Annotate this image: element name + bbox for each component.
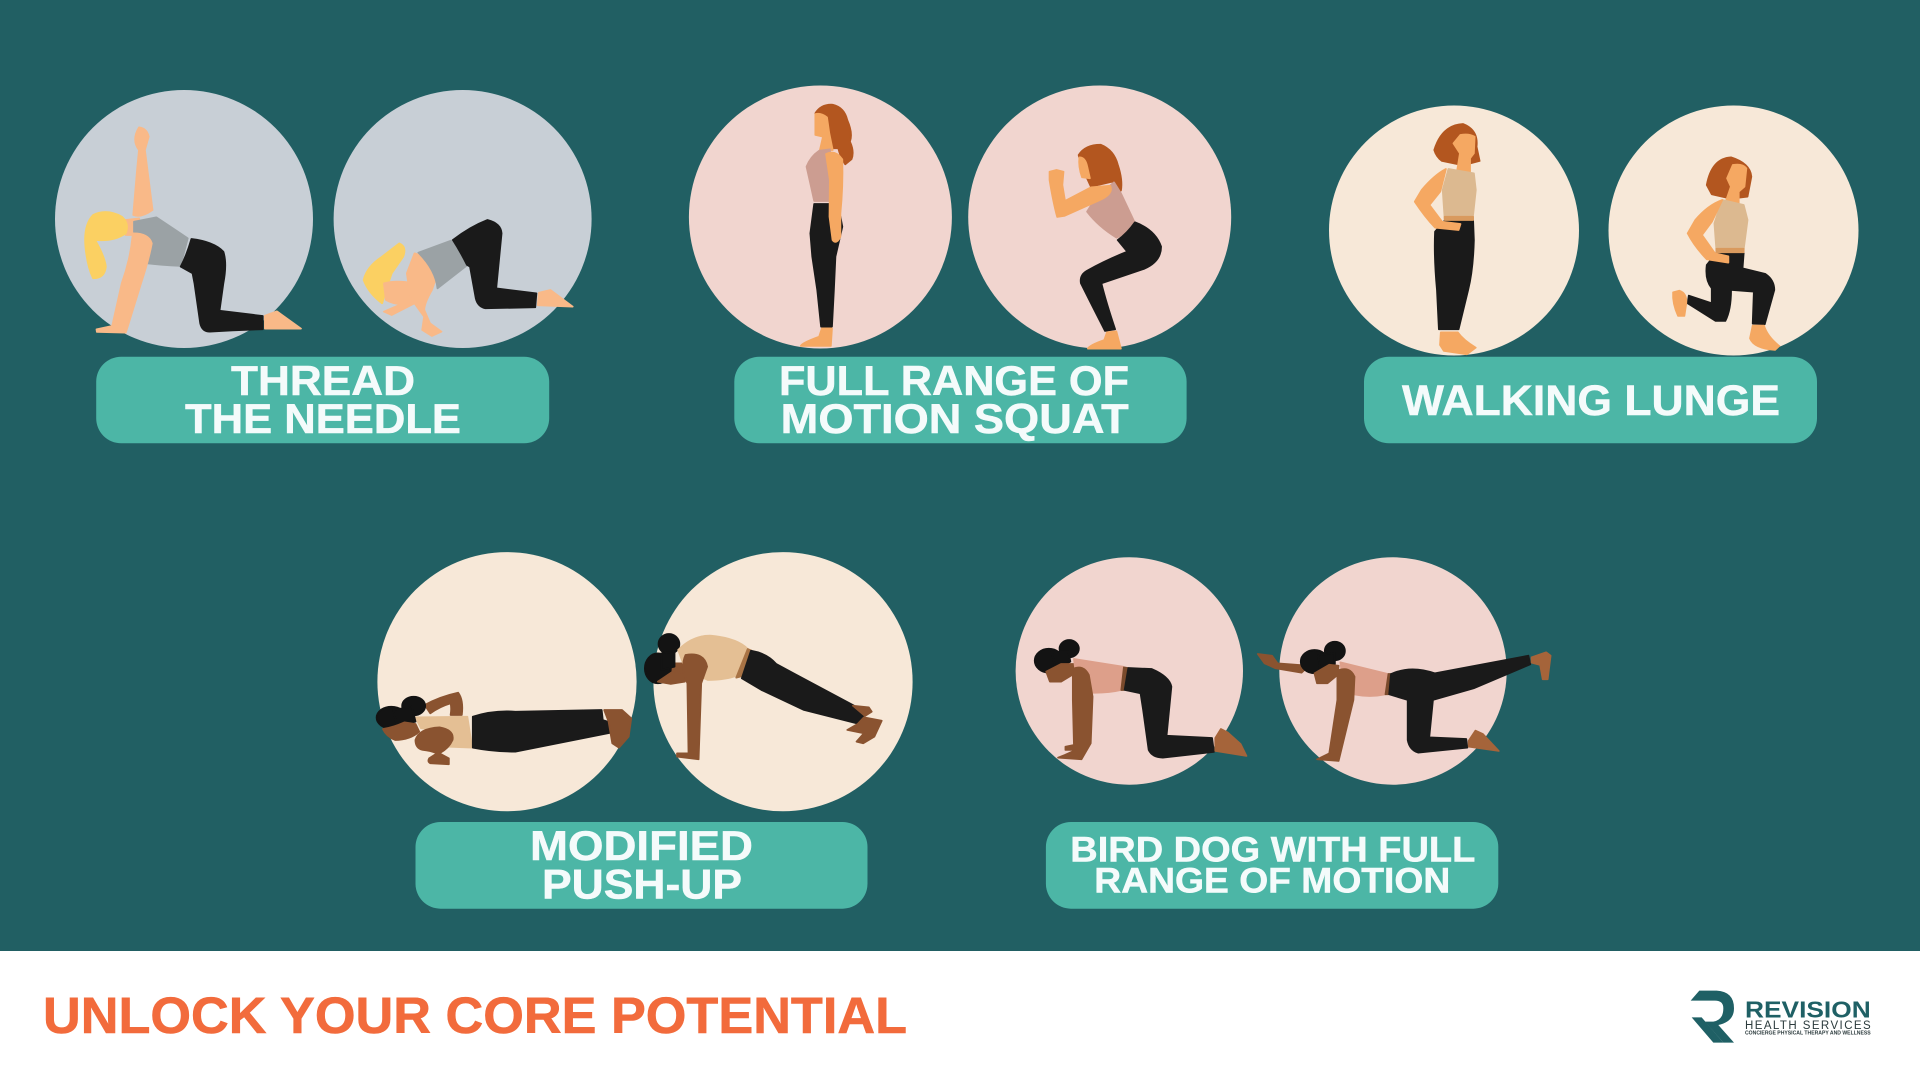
figure: lunge pose xyxy=(1673,157,1779,350)
label: walking lunge: WALKING LUNGE xyxy=(1402,377,1780,425)
label: thread the needle xyxy=(96,357,549,443)
label: walking lunge xyxy=(1364,357,1817,443)
label: bird dog with full range of motion xyxy=(1046,822,1498,909)
label: full range of motion squat xyxy=(734,357,1187,443)
logo subtitle: HEALTH SERVICES xyxy=(1745,1020,1871,1032)
label: thread the needle: THREAD xyxy=(231,358,415,404)
circle: lunge low xyxy=(1608,106,1858,356)
figure: arm raised pose xyxy=(85,127,301,333)
circle: push-up up xyxy=(653,552,913,811)
footer band xyxy=(0,951,1920,1080)
figure: opposite arm and leg extended xyxy=(1258,642,1551,761)
footer title: UNLOCK YOUR CORE POTENTIAL xyxy=(43,987,907,1044)
label: modified push-up: MODIFIED xyxy=(530,823,753,869)
logo tagline: CONCIERGE PHYSICAL THERAPY AND WELLNESS xyxy=(1745,1030,1871,1036)
circle: thread the needle end xyxy=(334,90,592,348)
circle: lunge standing xyxy=(1329,106,1579,356)
circle: push-up down xyxy=(377,552,637,811)
panel: modified push-up xyxy=(377,552,913,909)
label: full range of motion squat: MOTION SQUAT xyxy=(781,396,1129,442)
label: modified push-up xyxy=(416,822,868,909)
label: bird dog with full range of motion: BIRD DOG WITH FULL xyxy=(1070,831,1475,870)
circle: thread the needle start xyxy=(55,90,313,348)
panel: thread the needle xyxy=(55,90,592,443)
figure: all fours pose xyxy=(1035,640,1246,759)
circle: squat low xyxy=(968,86,1231,348)
panel: bird dog with full range of motion xyxy=(1016,557,1551,909)
figure: standing pose xyxy=(801,105,853,346)
figure: push-up lowered xyxy=(377,693,631,764)
figure: push-up raised xyxy=(645,634,882,759)
circle: bird dog extended xyxy=(1279,557,1507,785)
figure: hand on hip standing xyxy=(1415,124,1480,354)
logo: Revision Health Services xyxy=(1691,991,1871,1043)
label: modified push-up: PUSH-UP xyxy=(542,862,742,908)
figure: threaded arm pose xyxy=(364,220,573,336)
label: thread the needle: THE NEEDLE xyxy=(185,396,461,442)
figure: squat pose xyxy=(1050,145,1161,349)
label: full range of motion squat: FULL RANGE OF xyxy=(779,358,1129,404)
circle: bird dog start xyxy=(1016,557,1243,785)
label: bird dog with full range of motion: RANGE OF MOTION xyxy=(1094,861,1450,900)
logo wordmark: REVISION xyxy=(1745,997,1871,1023)
panel: full range of motion squat xyxy=(689,86,1231,443)
icon: R monogram xyxy=(1691,991,1734,1043)
panel: walking lunge xyxy=(1329,106,1858,443)
circle: squat standing xyxy=(689,86,952,348)
